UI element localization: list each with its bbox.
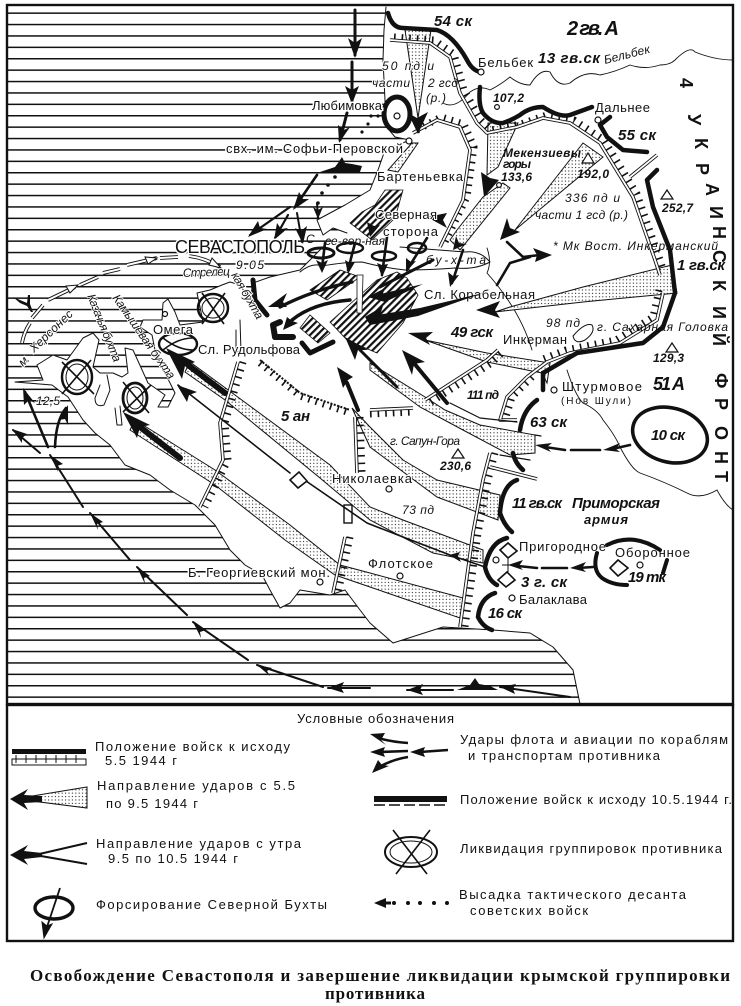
label: 129,3: 129,3 — [653, 351, 684, 365]
label: 4th Ukrainian Front: У — [684, 114, 704, 126]
wedge: 63 sk — [370, 363, 535, 455]
wedge: upper long strip — [185, 362, 483, 563]
ship north — [320, 157, 362, 172]
label: Mekenzievy gory: горы — [503, 157, 532, 171]
label: Kazachya bay: Казачья бухта — [84, 292, 124, 364]
fleet arrow lines — [13, 10, 570, 697]
label: 50 pd: 2 гсд — [427, 76, 458, 90]
label: 4th Ukrainian Front: С — [709, 250, 729, 263]
symbol — [374, 796, 447, 805]
legend: position 5 May — [12, 739, 290, 768]
label: 4th Ukrainian Front: Й — [709, 333, 730, 346]
label: Sevastopol: СЕВАСТОПОЛЬ — [175, 237, 305, 257]
label: 4th Ukrainian Front: И — [706, 206, 726, 219]
converging dark wedges — [365, 284, 483, 325]
label: Shturmovoe: Штурмовое — [562, 379, 642, 394]
legend: landing — [374, 887, 687, 918]
label: 55 sk: 55 ск — [618, 127, 657, 144]
label: 4th Ukrainian Front: О — [711, 426, 731, 440]
enemy group elimination symbols — [62, 97, 410, 413]
label: Belbek: Бельбек — [478, 55, 533, 70]
label: Dalnee: Дальнее — [595, 100, 650, 115]
text: и транспортам противника — [468, 748, 661, 763]
19 tk dashed arrow — [518, 566, 593, 568]
legend panel — [7, 705, 733, 941]
front double line — [200, 40, 663, 627]
label: 11 gv sk: 11 гв.ск — [512, 495, 563, 512]
city hatched areas — [300, 190, 418, 353]
group at Omega — [159, 333, 197, 355]
wedge: 54 sk — [405, 30, 431, 118]
wedge: to Severnaya — [450, 183, 510, 250]
front ticks — [205, 37, 664, 627]
label: Inkerman: Инкерман — [503, 332, 567, 347]
label: 192,0: 192,0 — [577, 167, 609, 181]
label: Flotskoe: Флотское — [368, 556, 433, 571]
label: 16 sk: 16 ск — [488, 605, 523, 622]
ground advance dashed arrows — [449, 443, 630, 572]
label: Bartenevka: Бартеньевка — [377, 169, 464, 184]
map labels — [15, 13, 731, 622]
symbol — [370, 733, 448, 773]
caption — [30, 966, 730, 1003]
narrow inlets — [95, 320, 241, 425]
label: 336 pd: 336 пд и — [565, 191, 620, 205]
map frame — [7, 5, 733, 704]
10 sk ellipse — [626, 399, 714, 471]
label: 4th Ukrainian Front: Т — [711, 471, 731, 482]
label: 4th Ukrainian Front: А — [702, 183, 722, 196]
label: Georgievsky monastery: Б. Георгиевский мон. — [188, 565, 330, 580]
wedge: Bartenevka — [388, 143, 418, 172]
label: Shturmovoe — [561, 379, 642, 407]
wedge: 49 gsk — [425, 340, 550, 383]
text — [97, 778, 295, 811]
label: 4th Ukrainian Front: Н — [709, 226, 729, 239]
text: Положение войск к исходу 10.5.1944 г. — [460, 792, 732, 807]
text — [460, 732, 728, 763]
group at Streletskaya — [198, 293, 228, 324]
label: 4th Ukrainian Front: Ф — [711, 373, 731, 388]
north bay shoreline — [300, 247, 490, 272]
Sakharnaya Golovka hill — [573, 324, 593, 342]
fleet arrowheads — [12, 38, 516, 695]
label: 98 pd: 98 пд — [546, 316, 580, 330]
plane icon — [13, 295, 33, 312]
label: 3 gv sk: 3 г. ск — [521, 574, 568, 591]
legend frame — [7, 705, 733, 941]
legend: strikes 9-10 May — [10, 836, 302, 866]
symbol — [12, 749, 86, 765]
label: bukhta: б у - х - т а — [426, 253, 486, 267]
label: Kamyshovaya bay: Камышевая бухта — [110, 292, 179, 382]
label: Nikolaevka: Николаевка — [332, 471, 413, 486]
label: Sl Korabelnaya: Сл. Корабельная — [424, 287, 535, 302]
label: 107,2: 107,2 — [493, 91, 524, 105]
label: Shturmovoe: (Нов Шули) — [561, 396, 631, 407]
elevation triangles — [452, 153, 678, 458]
label: 4th Ukrainian Front — [676, 78, 731, 482]
10 sk dashed arrow — [545, 445, 630, 450]
symbol — [10, 787, 87, 810]
settlement markers — [162, 69, 643, 601]
wedge: lower long strip — [130, 420, 463, 618]
label: Prigorodnoe: Пригородное — [519, 539, 606, 554]
ship south — [457, 678, 498, 690]
small front box — [344, 505, 352, 523]
group at Kamyshovaya — [123, 382, 151, 413]
label: 49 gsk: 49 гск — [450, 324, 494, 341]
caption: противника — [325, 984, 426, 1003]
label: 230,6: 230,6 — [439, 459, 471, 473]
label: 73 pd: 73 пд — [402, 503, 434, 517]
label: Vost. Inkermansky: * Мк Вост. Инкерманский — [553, 239, 718, 253]
landing dots — [316, 114, 380, 205]
wedge: 11 gv sk — [352, 408, 500, 520]
diamonds — [290, 472, 628, 587]
19 tk arrowheads — [449, 552, 586, 572]
front line of 10 May — [253, 13, 675, 630]
text: советских войск — [470, 903, 588, 918]
coastline — [15, 7, 580, 704]
text — [95, 739, 290, 768]
label: 50 pd: 50 пд и — [382, 59, 434, 73]
label: 252,7: 252,7 — [661, 201, 694, 215]
label: 19 tk: 19 тк — [628, 569, 667, 586]
legend: elimination — [385, 830, 723, 874]
label: 4th Ukrainian Front: И — [709, 306, 729, 319]
text: Положение войск к исходу — [95, 739, 290, 754]
legend: position 10 May — [374, 792, 732, 807]
symbol — [374, 898, 449, 908]
label: Streletskaya: Стрелец — [183, 264, 230, 280]
label: 4th Ukrainian Front: Р — [692, 163, 712, 175]
air arc arrowheads — [66, 257, 221, 293]
caption: Освобождение Севастополя и завершение ликвидации крымской группировки — [30, 966, 730, 985]
label: Primorskaya army: армия — [584, 512, 628, 527]
label: 4th Ukrainian Front: К — [691, 138, 711, 150]
label: Mekenzievy gory: 133,6 — [501, 170, 532, 184]
label: Sl Rudolfova: Сл. Рудольфова — [198, 342, 301, 357]
label: Sapun Gora: г. Сапун-Гора — [390, 434, 460, 448]
label: Sofia Perovskaya state farm: свх. им. Софьи-Перовской — [226, 141, 403, 156]
label: 2 gv A: 2 гв. А — [566, 18, 619, 40]
label: Mekenzievy gory — [501, 146, 582, 184]
text: Высадка тактического десанта — [459, 887, 687, 902]
text: Ликвидация группировок противника — [460, 841, 723, 856]
label: 336 pd — [535, 191, 628, 222]
label: 4th Ukrainian Front: К — [709, 280, 729, 292]
text — [459, 887, 687, 918]
map panel — [7, 5, 733, 704]
legend title: Условные обозначения — [297, 711, 454, 726]
text — [96, 836, 302, 866]
wedge: 55 sk — [515, 143, 603, 230]
label: Lubimovka: Любимовка — [312, 98, 383, 113]
label: Primorskaya army — [572, 495, 660, 527]
symbol — [385, 830, 437, 874]
label: 51 A: 51 А — [653, 374, 685, 394]
label: 4th Ukrainian Front: Р — [711, 398, 731, 410]
wedge: 1 gv sk — [495, 265, 677, 312]
morning 9 May strike lines — [140, 237, 541, 567]
label: 4th Ukrainian Front: 4 — [676, 78, 696, 88]
label: 10 sk: 10 ск — [651, 427, 686, 444]
text: Направление ударов с утра — [96, 836, 302, 851]
label: 50 pd: части — [372, 76, 410, 90]
label: 50 pd: (р.) — [426, 91, 446, 105]
label: Primorskaya army: Приморская — [572, 495, 660, 512]
text: по 9.5 1944 г — [106, 796, 198, 811]
arrowheads — [123, 112, 552, 438]
label: Severnaya bay: С — [306, 232, 315, 246]
strike wedges 5-9 May — [130, 30, 677, 618]
label: Severnaya storona: Северная — [375, 207, 437, 222]
label: bay letters: кая бухта — [228, 270, 267, 322]
legend: strikes 5-9 May — [10, 778, 295, 811]
label: Oboronnoe: Оборонное — [615, 545, 690, 560]
label: cape: м. — [15, 352, 32, 369]
label: 336 pd: части 1 гсд (р.) — [535, 208, 628, 222]
label: 13 gv sk: 13 гв.ск — [538, 50, 601, 67]
label: 5 an: 5 ан — [281, 408, 310, 425]
rivers — [443, 50, 733, 510]
label: 63 sk: 63 ск — [530, 414, 568, 431]
label: 111 pd: 111 пд — [467, 388, 499, 402]
label: Belbek river: Бельбек — [602, 42, 653, 67]
Northern bay crossing symbols — [308, 243, 426, 260]
wedge: Mekenzievy — [487, 123, 518, 175]
text: Направление ударов с 5.5 — [97, 778, 295, 793]
text: 5.5 1944 г — [105, 753, 177, 768]
text: Удары флота и авиации по кораблям — [460, 732, 728, 747]
label: Omega: Омега — [153, 322, 194, 337]
dashed air arc inner — [22, 256, 220, 343]
fleet strikes along coast — [12, 10, 570, 697]
10 sk arrowheads — [535, 443, 620, 452]
symbol — [35, 888, 73, 938]
label: 50 pd — [372, 59, 458, 105]
front inner white line — [200, 40, 663, 627]
label: Severnaya storona: сторона — [383, 224, 439, 239]
air strikes and plane — [13, 256, 221, 343]
label: Balaklava: Балаклава — [519, 592, 588, 607]
text: Форсирование Северной Бухты — [96, 897, 327, 912]
label: 54 sk: 54 ск — [434, 13, 473, 30]
legend: crossing — [35, 888, 327, 938]
label: bay name: се-вер-ная — [325, 234, 386, 248]
Lubimovka encirclement — [384, 97, 410, 131]
label: Sakharnaya Golovka: г. Сахарная Головка — [597, 320, 728, 334]
symbol — [10, 843, 87, 865]
label: 9.05: 9.05 — [236, 258, 264, 272]
initial front line — [200, 37, 664, 627]
sea hatching — [8, 7, 580, 704]
text: 9.5 по 10.5 1944 г — [108, 851, 238, 866]
label: Severnaya storona — [375, 207, 439, 239]
label: 12,5: 12,5 — [36, 394, 60, 408]
dashed air arc — [22, 256, 220, 343]
label: 1 gv sk: 1 гв.ск — [677, 257, 726, 274]
label: Khersones: Херсонес — [26, 307, 76, 356]
label: 4th Ukrainian Front: Н — [711, 451, 731, 464]
group at Khersones — [62, 360, 94, 394]
legend: fleet strikes — [370, 732, 728, 773]
label: Mekenzievy gory: Мекензиевы — [503, 146, 582, 160]
